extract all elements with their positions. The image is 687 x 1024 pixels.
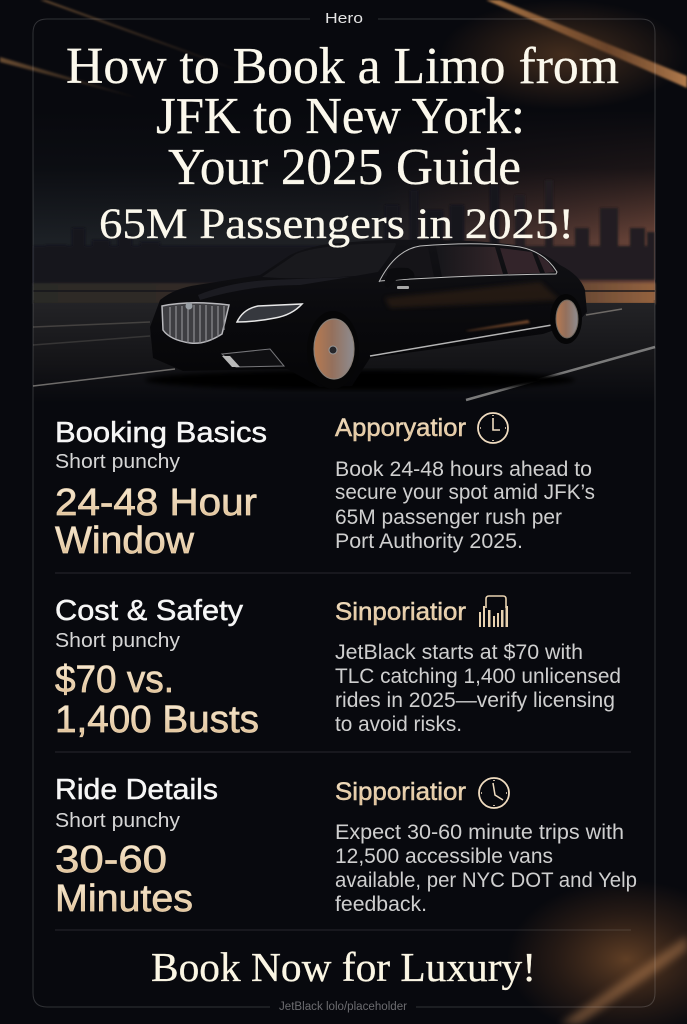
subheading: Short punchy — [55, 810, 180, 832]
section: Cost & Safety — [55, 595, 621, 741]
description — [335, 641, 621, 736]
description: secure your spot amid JFK’s — [335, 481, 595, 504]
car body — [150, 240, 587, 387]
icon: clock — [479, 778, 509, 808]
description: 12,500 accessible vans — [335, 845, 553, 868]
hood highlight — [198, 277, 350, 300]
door reflections — [385, 282, 560, 308]
stat: $70 vs. 1,400 Busts — [55, 659, 259, 741]
badge — [186, 302, 192, 310]
icon: clock — [478, 413, 508, 443]
stat: 24-48 Hour Window — [55, 482, 257, 562]
heading: Booking Basics: Booking Basics — [55, 417, 267, 449]
section: Ride Details — [55, 774, 637, 920]
heading: Cost & Safety: Cost & Safety — [55, 595, 244, 627]
subheading: Short punchy — [55, 630, 180, 652]
rear wheel — [550, 294, 582, 344]
description: Expect 30-60 minute trips with — [335, 821, 624, 844]
label: Sipporiatior: Sipporiatior — [335, 778, 466, 806]
title: JFK to New York: — [156, 88, 525, 145]
description: rides in 2025—verify licensing — [335, 689, 615, 712]
car shadow — [145, 370, 575, 390]
section: Booking Basics — [55, 413, 595, 562]
stat: $70 vs. 1,400 Busts: $70 vs. — [55, 659, 174, 701]
windshield — [262, 243, 396, 278]
description — [335, 458, 595, 553]
description: Port Authority 2025. — [335, 530, 523, 553]
title: Your 2025 Guide — [168, 139, 521, 196]
title: How to Book a Limo from — [66, 38, 619, 95]
lower intake — [222, 349, 284, 367]
description: to avoid risks. — [335, 713, 462, 736]
stat: $70 vs. 1,400 Busts: 1,400 Busts — [55, 699, 259, 741]
description: TLC catching 1,400 unlicensed — [335, 665, 621, 688]
heading: Ride Details: Ride Details — [55, 774, 218, 806]
label: Apporyatior: Apporyatior — [335, 414, 466, 442]
road — [33, 303, 655, 403]
headlight — [237, 304, 302, 322]
chrome window trim — [379, 244, 557, 282]
skyline — [33, 180, 655, 286]
stat: 30-60 Minutes: 30-60 — [55, 839, 167, 881]
title — [66, 38, 619, 196]
stat: 30-60 Minutes: Minutes — [55, 878, 193, 920]
barrier — [33, 283, 655, 304]
stat: 24-48 Hour Window: Window — [55, 520, 195, 562]
limousine — [145, 240, 587, 390]
door handle — [397, 286, 409, 289]
call to action: Book Now for Luxury! — [151, 944, 536, 990]
hero photo: city skyline and highway at dusk — [33, 110, 655, 403]
description — [335, 821, 637, 916]
stat: 30-60 Minutes — [55, 839, 193, 920]
frame label: Hero: Hero — [325, 10, 363, 27]
description: available, per NYC DOT and Yelp — [335, 869, 637, 892]
grille — [162, 303, 229, 343]
description: 65M passenger rush per — [335, 506, 562, 529]
footer placeholder: JetBlack lolo/placeholder — [279, 1001, 407, 1013]
subheading: Short punchy — [55, 451, 180, 473]
side windows — [384, 247, 434, 277]
description: Book 24-48 hours ahead to — [335, 458, 592, 481]
icon: bar chart building — [479, 596, 508, 627]
description: JetBlack starts at $70 with — [335, 641, 583, 664]
front wheel — [307, 311, 359, 389]
description: feedback. — [335, 893, 427, 916]
mirror — [384, 268, 414, 288]
subtitle: 65M Passengers: 65M Passengers in 2025! — [99, 201, 574, 248]
label: Sinporiatior: Sinporiatior — [335, 598, 466, 626]
stat: 24-48 Hour Window: 24-48 Hour — [55, 482, 257, 524]
